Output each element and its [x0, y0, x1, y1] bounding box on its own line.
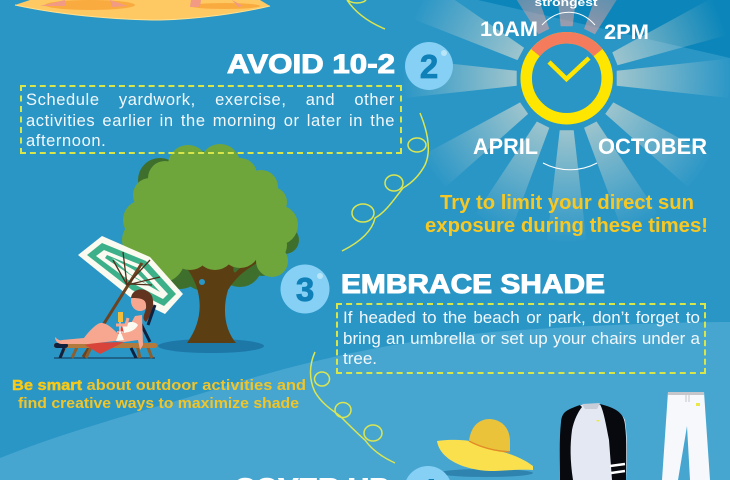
- sun clock: [526, 38, 607, 119]
- badge 3: [280, 264, 330, 314]
- label: 2PM: 2PM: [604, 20, 649, 44]
- woman on sun lounger: [54, 289, 157, 358]
- arc above sun: [542, 12, 595, 25]
- label: APRIL: APRIL: [473, 134, 538, 159]
- callout: limit sun exposure: exposure during these times!: [425, 215, 708, 237]
- callout: be smart: find creative ways to maximize shade: [18, 396, 299, 412]
- badge 2: 2: [420, 48, 438, 85]
- beach umbrella: [78, 236, 183, 357]
- squiggle: avoid to shade: [342, 113, 428, 251]
- heading: embrace shade: EMBRACE SHADE: [341, 269, 605, 299]
- callout: limit sun exposure: [425, 192, 708, 237]
- squiggle: shade to cover up: [310, 352, 395, 463]
- text: embrace shade: [343, 308, 700, 368]
- arc below sun: [543, 163, 597, 170]
- callout: be smart: [12, 378, 306, 412]
- callout: limit sun exposure: Try to limit your direct sun: [440, 192, 694, 214]
- callout: be smart: Be smart about outdoor activities and: [12, 378, 306, 394]
- text: avoid 10-2: Schedule yardwork, exercise, and other: [26, 91, 395, 109]
- sun hat: [437, 419, 533, 477]
- dashed box: avoid 10-2: [20, 85, 402, 154]
- sun rays: [402, 0, 730, 243]
- text: embrace shade: bring an umbrella or set up your chairs under a: [343, 328, 700, 348]
- text: avoid 10-2: afternoon.: [26, 132, 106, 150]
- white trousers: [662, 392, 710, 480]
- heading: avoid 10-2: AVOID 10-2: [227, 49, 395, 79]
- tree: [122, 144, 299, 353]
- background: lighter lower hill: [0, 322, 730, 480]
- dashed box: embrace shade: [336, 303, 706, 374]
- text: embrace shade: If headed to the beach or park, don’t forget to: [343, 308, 700, 327]
- text: avoid 10-2: [26, 91, 395, 150]
- label: 10AM: 10AM: [480, 17, 538, 41]
- badge 3: 3: [296, 271, 314, 308]
- squiggle top: [347, 0, 385, 29]
- background: dark upper right band: [478, 0, 730, 58]
- text: embrace shade: tree.: [343, 349, 377, 368]
- surfboard with feet: [15, 0, 270, 20]
- text: avoid 10-2: activities earlier in the morning or later in the: [26, 112, 395, 130]
- badge 2: [405, 42, 453, 90]
- label: OCTOBER: OCTOBER: [598, 134, 707, 159]
- badge 4: [404, 466, 452, 480]
- long sleeve shirt: [560, 403, 627, 480]
